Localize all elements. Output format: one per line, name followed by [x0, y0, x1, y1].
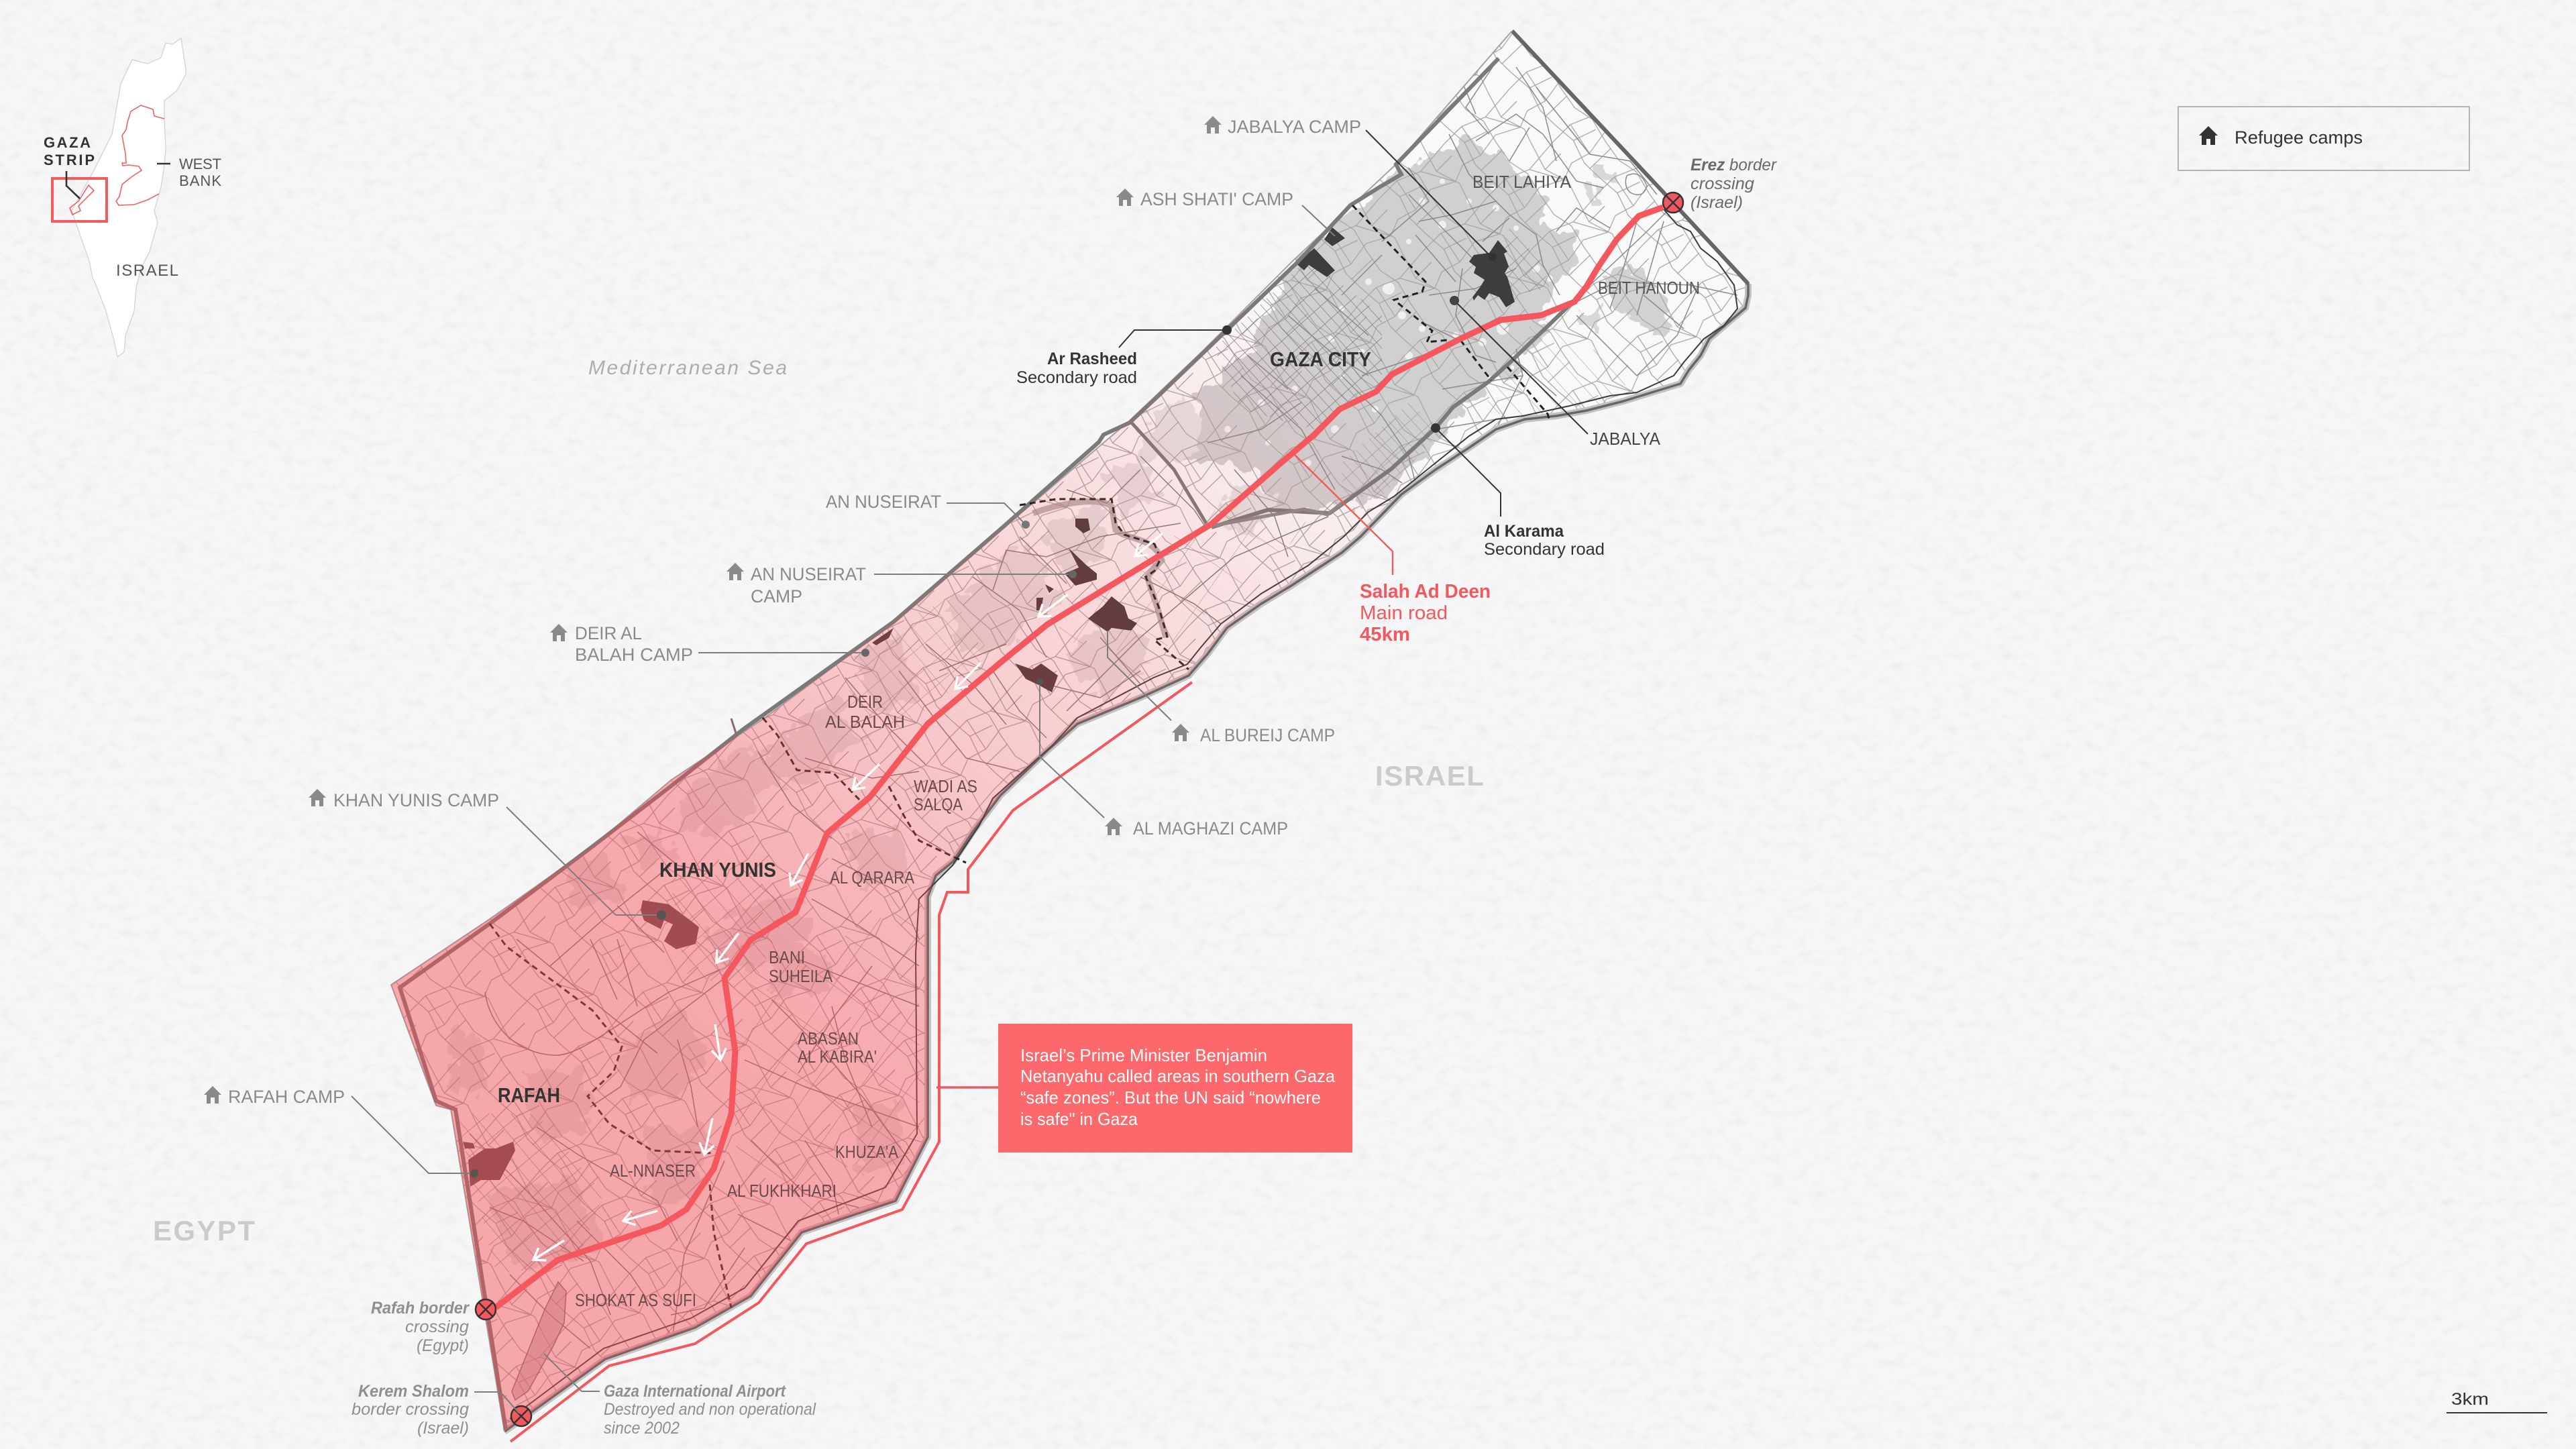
- annotation: Kerem Shalom crossing: Kerem Shalom: [358, 1382, 469, 1401]
- built-up: Gaza City and Jabalya: [1167, 138, 1576, 510]
- camp: Jabalya: [1469, 240, 1515, 307]
- annotation: Rafah crossing: crossing: [405, 1318, 469, 1336]
- streets: Khan Yunis grid: [671, 872, 792, 993]
- streets: road network north: [1208, 67, 1737, 510]
- jetty at Deir Al Balah: [731, 718, 737, 735]
- Ar Rasheed coastal road: [400, 58, 1499, 1430]
- camp: Khan Yunis: [641, 900, 699, 949]
- legend text: Refugee camps: [2235, 127, 2363, 148]
- leader: Al Maghazi camp: [1036, 678, 1104, 818]
- inset: locator rectangle: [52, 178, 107, 221]
- leader lines: [352, 130, 1588, 1413]
- annotation: Ar Rasheed road: Ar Rasheed: [1047, 350, 1137, 368]
- place: Gaza City: GAZA CITY: [1270, 347, 1371, 371]
- annotation: Erez crossing: crossing: [1690, 174, 1754, 193]
- strip land base: [391, 31, 1748, 1432]
- map of the Gaza Strip: [390, 30, 1752, 1443]
- place: Al Qarara: AL QARARA: [830, 867, 915, 888]
- leader: An Nuseirat camp: [874, 570, 1077, 578]
- inset label: Gaza Strip: STRIP: [44, 152, 95, 168]
- camp labels with house icons: [204, 116, 1361, 1107]
- callout text: Netanyahu called areas in southern Gaza: [1020, 1066, 1336, 1086]
- streets: Beit Hanoun farm parcels: [1483, 315, 1637, 423]
- callout box: [998, 1024, 1352, 1152]
- leader: Jabalya camp: [1366, 130, 1497, 261]
- coastal outline: [391, 31, 1512, 1432]
- leader: Deir Al Balah camp: [698, 649, 869, 657]
- place: Bani Suheila: SUHEILA: [769, 966, 833, 986]
- leader: An Nuseirat: [947, 503, 1030, 529]
- red gradient overlay marking southern zone: [391, 31, 1748, 1432]
- inset locator map: [44, 38, 221, 357]
- place: Bani Suheila: BANI: [769, 947, 805, 967]
- leader: Al Karama: [1431, 423, 1501, 517]
- place: Deir Al Balah: DEIR: [847, 692, 883, 712]
- leader: Al Bureij camp: [1108, 631, 1171, 720]
- inset label: West Bank: BANK: [179, 172, 221, 189]
- streets: road network south: [470, 751, 919, 1348]
- streets: Gaza City grid: [1214, 258, 1382, 429]
- label: Egypt: EGYPT: [153, 1215, 255, 1246]
- inset: Gaza leader line: [66, 171, 80, 199]
- eastern border double band: [504, 284, 1748, 1432]
- place: Shokat As Sufi: SHOKAT AS SUFI: [575, 1290, 696, 1310]
- inner border fence: [510, 209, 1737, 1419]
- place: Beit Lahiya: BEIT LAHIYA: [1472, 172, 1572, 192]
- legend box: [2178, 107, 2469, 170]
- annotation: Al Karama road: Secondary road: [1484, 540, 1605, 559]
- boundary: Nuseirat: [1020, 499, 1189, 669]
- label: Al Maghazi camp: AL MAGHAZI CAMP: [1133, 818, 1288, 839]
- place: Wadi As Salqa: SALQA: [914, 794, 963, 814]
- label: Deir Al Balah camp: BALAH CAMP: [575, 645, 693, 665]
- place: Wadi As Salqa: WADI AS: [914, 776, 977, 796]
- built-up: small patches: [1576, 161, 1610, 329]
- place: Khan Yunis: KHAN YUNIS: [659, 858, 776, 881]
- camp: Deir Al Balah: [872, 628, 894, 645]
- streets: Jabalya grid: [1493, 228, 1550, 295]
- callout connector: [936, 1086, 1002, 1089]
- boundary: Deir Al Balah / Khan Yunis: [763, 718, 966, 863]
- leader: Kerem Shalom: [474, 1392, 519, 1413]
- label: An Nuseirat town: AN NUSEIRAT: [826, 492, 941, 512]
- border crossing: Kerem Shalom: [511, 1406, 531, 1426]
- label: An Nuseirat camp: [727, 563, 866, 606]
- leader: Khan Yunis camp: [506, 807, 666, 920]
- cross road east: [1212, 503, 1342, 526]
- camp: Al Bureij: [1088, 596, 1137, 632]
- place names on the map: [498, 172, 1700, 1310]
- inset: West Bank tick: [157, 163, 170, 164]
- place: Al Fukhkhari: AL FUKHKHARI: [727, 1181, 837, 1201]
- inset: Gaza Strip outline: [70, 185, 94, 215]
- road and crossing annotations: [352, 156, 1778, 1438]
- boundary: southern Rafah: [710, 1185, 731, 1307]
- Al Karama road: [1212, 299, 1576, 527]
- label: An Nuseirat camp: CAMP: [751, 586, 802, 606]
- inset: West Bank outline: [116, 105, 164, 205]
- streets: Nuseirat and Bureij parcels: [1046, 510, 1315, 657]
- camp: Ash Shati: [1296, 227, 1345, 277]
- eastern border dark road: [504, 202, 1748, 1432]
- place: Abasan Al Kabira: AL KABIRA': [798, 1046, 877, 1067]
- annotation: Erez crossing: Erez border: [1690, 156, 1778, 174]
- label: An Nuseirat camp: AN NUSEIRAT: [751, 564, 866, 584]
- streets: Deir al Balah grid: [845, 597, 993, 731]
- inset label: Gaza Strip: GAZA: [44, 134, 91, 151]
- camp: An Nuseirat: [1036, 519, 1097, 610]
- label: Deir Al Balah camp: [550, 623, 693, 665]
- callout text: “safe zones”. But the UN said “nowhere: [1020, 1087, 1321, 1108]
- label: Israel: ISRAEL: [1375, 760, 1484, 792]
- annotation: Kerem Shalom crossing: border crossing: [352, 1400, 469, 1419]
- callout text: is safe" in Gaza: [1020, 1109, 1138, 1129]
- label: Mediterranean Sea: Mediterranean Sea: [588, 357, 787, 379]
- annotation: Gaza International Airport: since 2002: [604, 1419, 680, 1438]
- place: Rafah: RAFAH: [498, 1083, 560, 1107]
- streets: eastern Khan Yunis parcels: [731, 899, 919, 1208]
- legend icon: house: [2199, 126, 2218, 145]
- annotation: Salah Ad Deen road: Salah Ad Deen: [1360, 581, 1491, 602]
- callout text: Israel’s Prime Minister Benjamin: [1020, 1045, 1267, 1065]
- border crossing: Erez: [1663, 193, 1683, 213]
- scale line: [2447, 1412, 2547, 1413]
- annotation: Salah Ad Deen road: 45km: [1360, 624, 1410, 645]
- streets: whole-strip road network: [335, 0, 1811, 1449]
- built-up areas and street network: [396, 34, 1745, 1424]
- place: Deir Al Balah: AL BALAH: [825, 712, 905, 732]
- place: Abasan Al Kabira: ABASAN: [798, 1028, 859, 1049]
- label: Ash Shati camp: ASH SHATI' CAMP: [1140, 189, 1293, 209]
- airport footprint: [512, 1282, 566, 1400]
- camp: Rafah: [463, 1142, 515, 1187]
- cross road to coast: [1130, 421, 1206, 523]
- streets: road network middle: [805, 456, 1328, 852]
- governorate boundaries: [490, 205, 1550, 1307]
- built-up areas: [451, 138, 1677, 1275]
- annotation: Kerem Shalom crossing: (Israel): [417, 1419, 469, 1438]
- label: Rafah camp: RAFAH CAMP: [228, 1087, 345, 1107]
- built-up: gaps in urban fabric: [1224, 178, 1553, 466]
- place: Jabalya: JABALYA: [1590, 429, 1661, 449]
- sea and country labels: [153, 357, 1484, 1246]
- inset label: West Bank: WEST: [179, 156, 221, 172]
- camp: Al Maghazi: [1015, 663, 1058, 692]
- streets: southern Gaza City: [1342, 402, 1442, 496]
- scale label: 3km: [2451, 1390, 2489, 1409]
- streets: Rafah grid: [456, 1114, 604, 1275]
- leader: Ash Shati camp: [1302, 205, 1335, 236]
- boundary: Gaza City / North Gaza: [1352, 205, 1550, 421]
- annotation: Rafah crossing: (Egypt): [417, 1336, 469, 1355]
- built-up: southern patches: [451, 396, 1275, 1275]
- annotation: Gaza International Airport: Destroyed and non operational: [604, 1400, 816, 1419]
- label: Al Bureij camp: AL BUREIJ CAMP: [1200, 725, 1335, 745]
- callout: safe zones: [936, 1024, 1352, 1152]
- border crossing: Rafah: [476, 1299, 496, 1320]
- wadi band: [1033, 502, 1166, 637]
- annotation: Erez crossing: (Israel): [1690, 193, 1743, 212]
- annotation: Ar Rasheed road: Secondary road: [1016, 368, 1137, 387]
- label: Jabalya camp: JABALYA CAMP: [1228, 117, 1361, 137]
- leader: Rafah camp: [352, 1096, 478, 1177]
- inset: Israel silhouette: [72, 38, 186, 357]
- outer red buffer line: [511, 682, 1192, 1442]
- legend: refugee camps: [2178, 107, 2469, 170]
- annotation: Al Karama road: Al Karama: [1484, 522, 1564, 541]
- place: Al-Nnaser: AL-NNASER: [610, 1161, 696, 1181]
- leader: Salah Ad Deen: [1293, 453, 1393, 575]
- label: Khan Yunis camp: KHAN YUNIS CAMP: [333, 790, 499, 810]
- camps: [463, 227, 1515, 1187]
- built-up: Beit Hanoun: [1597, 262, 1677, 335]
- annotation: Gaza International Airport: Gaza International Airport: [604, 1382, 786, 1401]
- annotation: Salah Ad Deen road: Main road: [1360, 602, 1448, 624]
- northern border: [1512, 31, 1748, 284]
- place: Khuza'a: KHUZA'A: [835, 1142, 899, 1162]
- leader: Gaza airport: [544, 1354, 600, 1391]
- boundary: Rafah / Khan Yunis: [490, 924, 712, 1153]
- Salah Ad Deen main road: [496, 207, 1663, 1307]
- leader: Ar Rasheed: [1119, 325, 1232, 347]
- label: Deir Al Balah camp: DEIR AL: [575, 623, 642, 643]
- place: Beit Hanoun: BEIT HANOUN: [1598, 278, 1700, 298]
- direction arrows: [533, 533, 1163, 1260]
- inset label: Israel: ISRAEL: [116, 262, 178, 280]
- leader: Jabalya: [1450, 296, 1588, 434]
- annotation: Rafah crossing: Rafah border: [371, 1299, 470, 1318]
